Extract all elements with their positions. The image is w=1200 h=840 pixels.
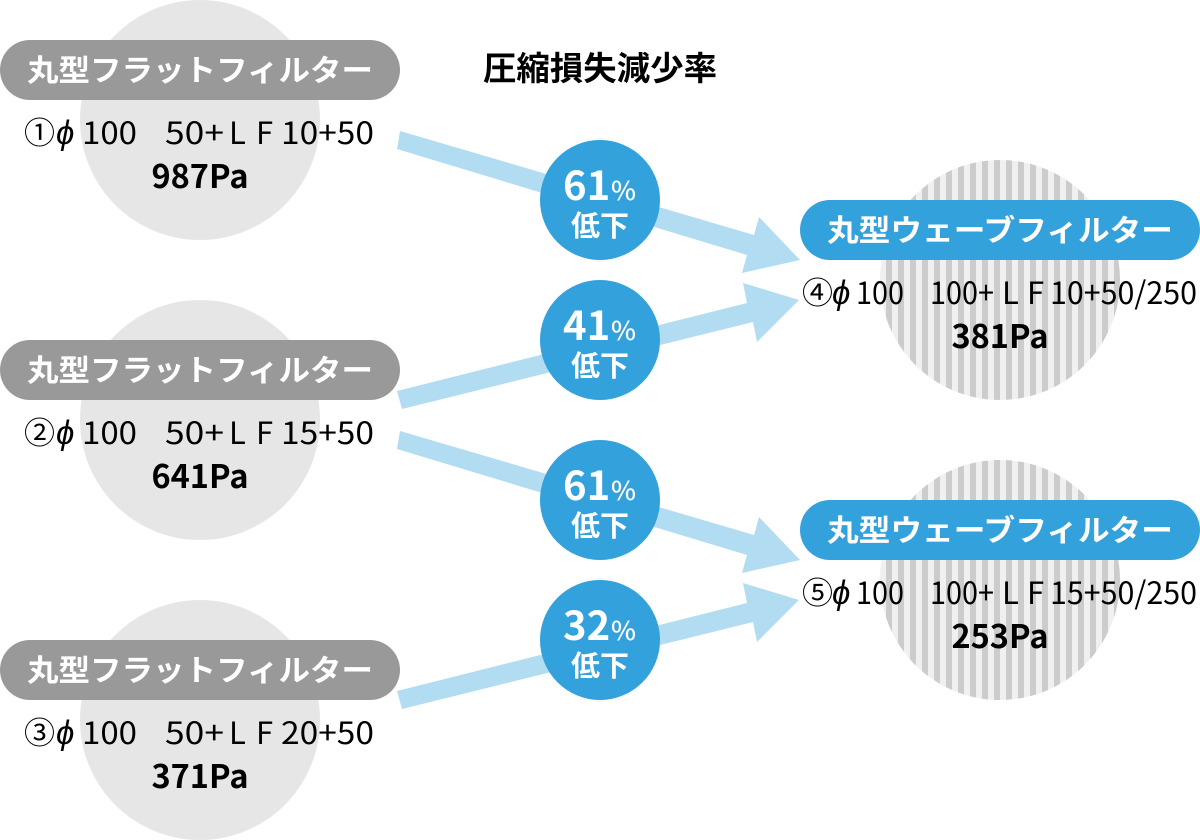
badge: 41% reduction: 41 bbox=[563, 294, 610, 352]
title: 圧縮損失減少率 bbox=[483, 42, 717, 90]
wave filter 5 spec: 100 bbox=[856, 568, 904, 613]
flat filter 2 spec: 15+50 bbox=[281, 408, 374, 453]
flat filter 3 backdrop circle bbox=[80, 600, 320, 840]
flat filter 3 spec bbox=[24, 706, 374, 754]
flat filter 1 label pill bbox=[0, 40, 400, 100]
flat filter 2 label pill: 丸型フラットフィルター bbox=[27, 346, 373, 390]
wave filter 5 label pill: 丸型ウェーブフィルター bbox=[827, 506, 1173, 550]
badge: 41% reduction: % bbox=[611, 311, 636, 348]
badge: 61% reduction second: 低下 bbox=[571, 503, 629, 545]
flat filter 1 backdrop circle bbox=[80, 0, 320, 240]
wave filter 5 pressure: 253Pa bbox=[951, 611, 1049, 658]
flat filter 2 spec: ϕ bbox=[56, 406, 74, 454]
arrow: filter 3 to filter 5 bbox=[397, 583, 799, 709]
wave filter 5 spec: 100+ bbox=[930, 568, 994, 613]
flat filter 3 pressure: 371Pa bbox=[151, 751, 249, 798]
flat filter 2 spec bbox=[24, 406, 374, 454]
wave filter 5 striped circle bbox=[880, 460, 1120, 700]
wave filter 5 spec bbox=[802, 566, 1197, 614]
flat filter 3 spec: 50+ bbox=[165, 708, 224, 753]
wave filter 4 spec: 100 bbox=[856, 268, 904, 313]
wave filter 4 pressure: 381Pa bbox=[951, 311, 1049, 358]
wave filter 5 spec: F bbox=[1027, 568, 1044, 613]
badge: 61% reduction second bbox=[540, 440, 660, 560]
badge: 61% reduction: 低下 bbox=[571, 203, 629, 245]
badge: 32% reduction: 32 bbox=[563, 594, 610, 652]
arrow: filter 1 to filter 4 bbox=[397, 131, 800, 273]
flat filter 2 backdrop circle bbox=[80, 300, 320, 540]
flat filter 1 spec: ① bbox=[24, 108, 55, 153]
arrow: filter 2 to filter 4 bbox=[397, 283, 799, 409]
wave filter 5 spec: 15+50/250 bbox=[1050, 568, 1197, 613]
wave filter 4 striped circle bbox=[880, 160, 1120, 400]
flat filter 3 bbox=[0, 600, 400, 840]
flat filter 3 label pill: 丸型フラットフィルター bbox=[27, 646, 373, 690]
flat filter 3 label pill bbox=[0, 640, 400, 700]
badge: 61% reduction second: % bbox=[611, 471, 636, 508]
flat filter 1 label pill: 丸型フラットフィルター bbox=[27, 46, 373, 90]
arrow: filter 2 to filter 5 bbox=[397, 431, 800, 573]
wave filter 4 spec: ④ bbox=[802, 268, 833, 313]
flat filter 1 spec: L bbox=[229, 108, 246, 153]
wave filter 5 bbox=[800, 460, 1200, 700]
flat filter 2 bbox=[0, 300, 400, 540]
badge: 32% reduction bbox=[540, 580, 660, 700]
flat filter 1 spec: F bbox=[256, 108, 273, 153]
wave filter 5 spec: ⑤ bbox=[802, 568, 833, 613]
flat filter 1 spec bbox=[24, 106, 374, 154]
flat filter 1 pressure: 987Pa bbox=[151, 151, 249, 198]
flat filter 2 spec: F bbox=[256, 408, 273, 453]
flat filter 3 spec: 20+50 bbox=[281, 708, 374, 753]
badge: 61% reduction bbox=[540, 140, 660, 260]
wave filter 5 spec: L bbox=[1002, 568, 1019, 613]
wave filter 4 label pill: 丸型ウェーブフィルター bbox=[827, 206, 1173, 250]
wave filter 4 spec: ϕ bbox=[832, 266, 850, 314]
flat filter 3 spec: ϕ bbox=[56, 706, 74, 754]
wave filter 5 label pill bbox=[800, 500, 1200, 560]
wave filter 4 spec bbox=[802, 266, 1197, 314]
badge: 61% reduction second: 61 bbox=[563, 454, 610, 512]
badge: 41% reduction: 低下 bbox=[571, 343, 629, 385]
wave filter 4 spec: 100+ bbox=[930, 268, 994, 313]
flat filter 1 spec: 100 bbox=[82, 108, 137, 153]
flat filter 2 label pill bbox=[0, 340, 400, 400]
flat filter 3 spec: F bbox=[256, 708, 273, 753]
flat filter 3 spec: L bbox=[229, 708, 246, 753]
wave filter 4 spec: L bbox=[1002, 268, 1019, 313]
flat filter 2 pressure: 641Pa bbox=[151, 451, 249, 498]
flat filter 3 spec: ③ bbox=[24, 708, 55, 753]
wave filter 4 bbox=[800, 160, 1200, 400]
badge: 32% reduction: % bbox=[611, 611, 636, 648]
badge: 61% reduction: % bbox=[611, 171, 636, 208]
flat filter 2 spec: L bbox=[229, 408, 246, 453]
flat filter 1 bbox=[0, 0, 400, 240]
flat filter 1 spec: ϕ bbox=[56, 106, 74, 154]
wave filter 4 spec: 10+50/250 bbox=[1050, 268, 1197, 313]
flat filter 2 spec: ② bbox=[24, 408, 55, 453]
badge: 61% reduction: 61 bbox=[563, 154, 610, 212]
wave filter 4 spec: F bbox=[1027, 268, 1044, 313]
flat filter 1 spec: 50+ bbox=[165, 108, 224, 153]
flat filter 3 spec: 100 bbox=[82, 708, 137, 753]
flat filter 1 spec: 10+50 bbox=[281, 108, 374, 153]
wave filter 4 label pill bbox=[800, 200, 1200, 260]
badge: 41% reduction bbox=[540, 280, 660, 400]
badge: 32% reduction: 低下 bbox=[571, 643, 629, 685]
wave filter 5 spec: ϕ bbox=[832, 566, 850, 614]
flat filter 2 spec: 100 bbox=[82, 408, 137, 453]
flat filter 2 spec: 50+ bbox=[165, 408, 224, 453]
